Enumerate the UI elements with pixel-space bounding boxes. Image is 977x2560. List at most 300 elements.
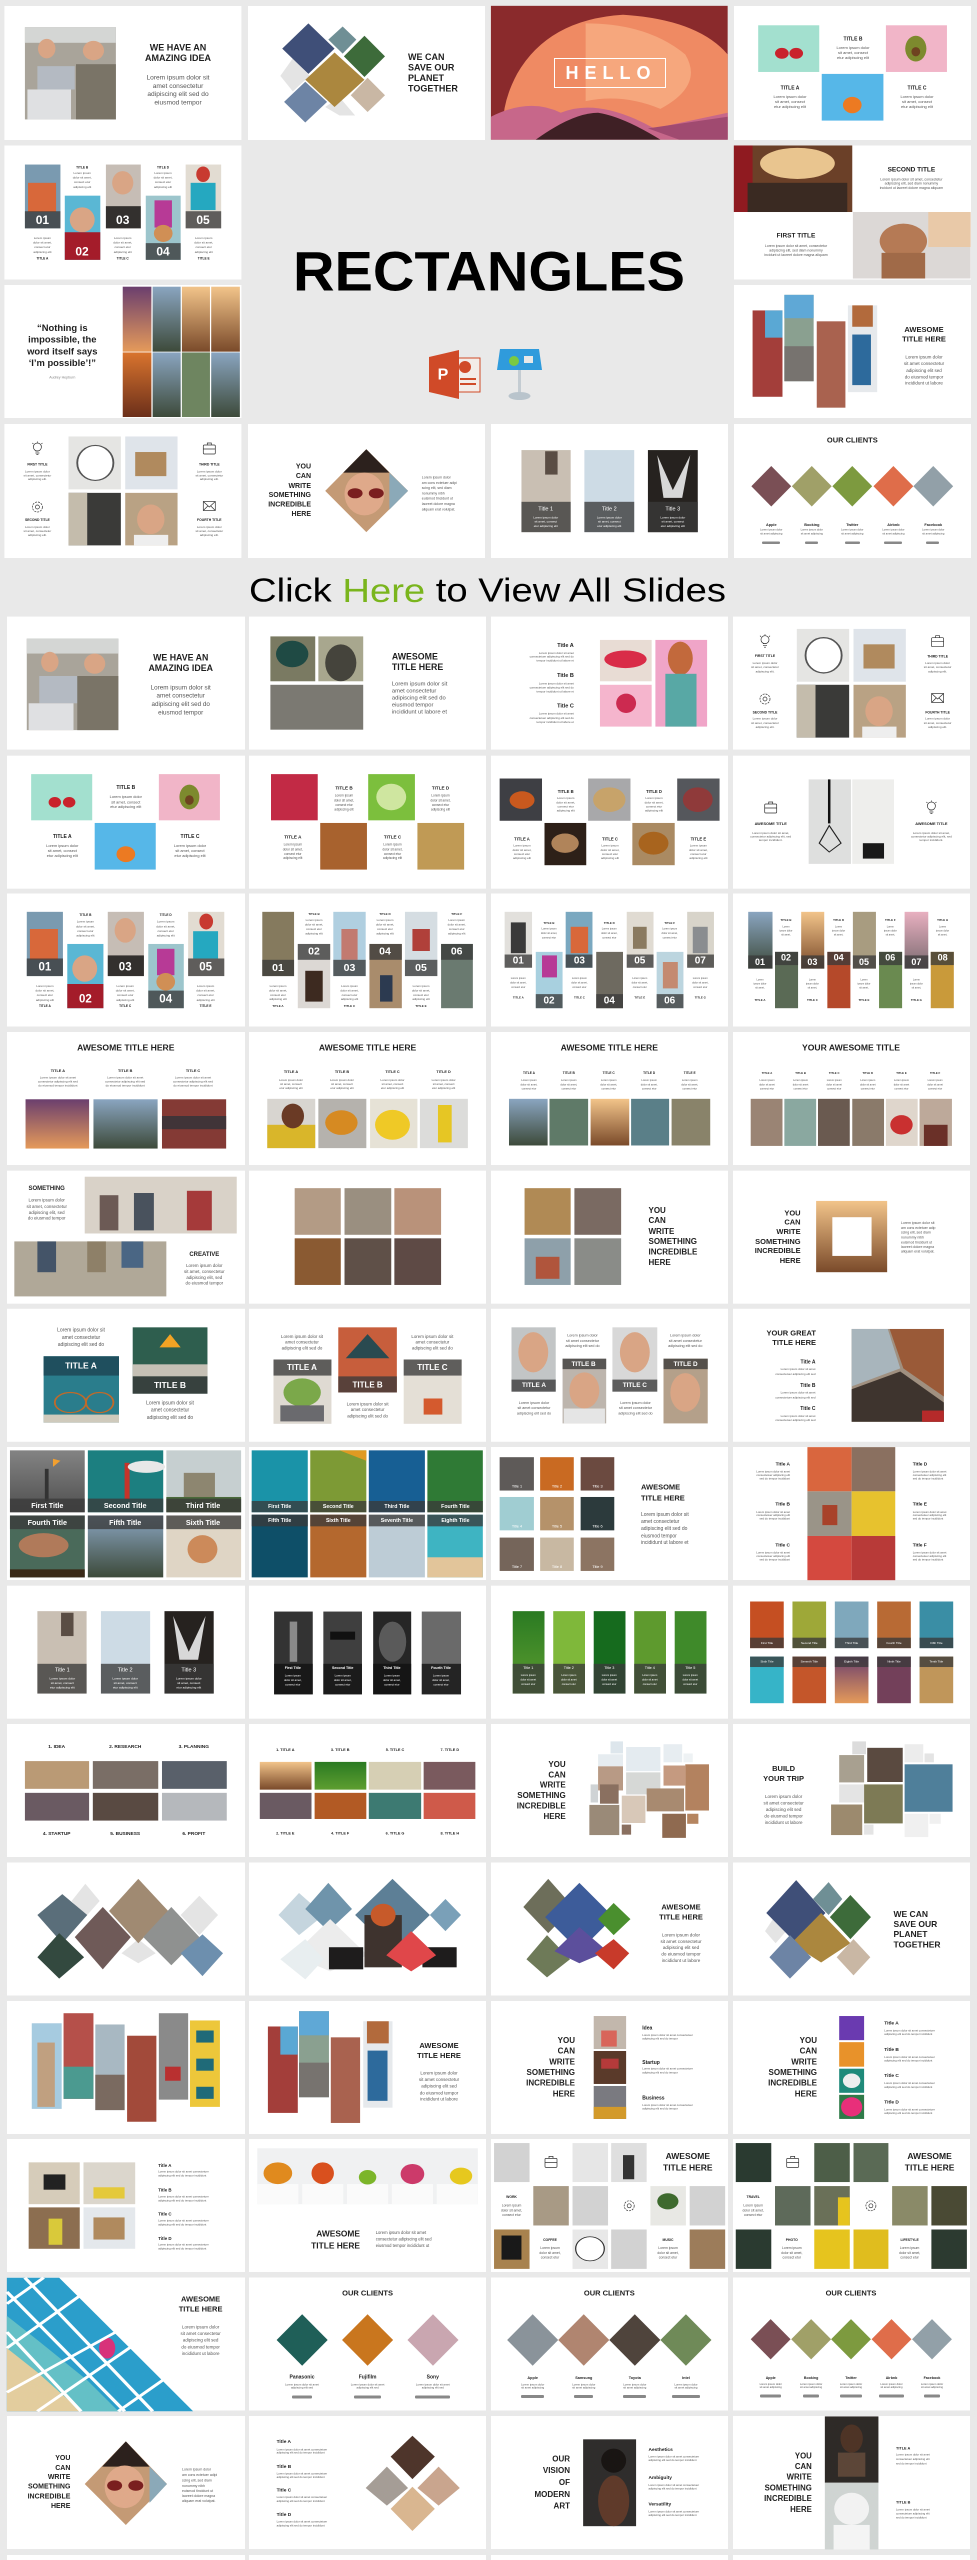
body text <box>158 2170 209 2250</box>
heading: SOMETHING <box>269 492 312 499</box>
heading: YOUR TRIP <box>763 1774 804 1783</box>
slide: something creative <box>7 1171 245 1304</box>
body text: consect etur <box>384 852 402 856</box>
heading <box>179 2294 222 2314</box>
body text <box>277 2447 327 2527</box>
body text: sit amet consectetur <box>419 2077 460 2082</box>
body text: etur adipiscing elit <box>330 1086 354 1090</box>
icon: PowerPoint logo: P <box>438 366 449 384</box>
heading: CAN <box>558 2046 575 2056</box>
body text: dolor sit amet, <box>681 1082 698 1086</box>
titles: TITLE C <box>344 1004 356 1008</box>
body text: adipiscing elit sed <box>766 1807 802 1812</box>
body text: sit amet consectetur <box>660 1939 702 1944</box>
titles: TITLE D <box>646 789 662 794</box>
body text <box>896 2453 930 2520</box>
client text: Lorem ipsum dolor <box>880 2382 903 2386</box>
body text: incididunt ut labore <box>182 2351 220 2356</box>
titles: FIRST TITLE <box>27 462 48 466</box>
body text: Lorem <box>782 926 790 928</box>
body text: Lorem ipsum dolor sit amet, <box>913 831 950 835</box>
body text: consect etur <box>900 2256 920 2260</box>
body text: sit amet consectetur <box>669 1339 703 1343</box>
body text: Lorem ipsum dolor <box>110 794 143 799</box>
body text: Lorem ipsum dolor sit amet, consectetur <box>765 244 828 248</box>
slide: eight numbered <box>733 894 970 1026</box>
heading: YOUR GREAT <box>767 1328 816 1338</box>
titles: TITLE B <box>116 785 136 791</box>
body text: sit amet, consect <box>382 1082 404 1086</box>
photos <box>271 774 464 870</box>
body text: adipiscing elit sed do tempor incididunt <box>884 2111 933 2115</box>
numbers: 04 <box>156 245 170 259</box>
titles: TITLE A <box>896 2447 910 2451</box>
heading: TITLE HERE <box>659 1912 703 1922</box>
tile labels: Title 8 <box>552 1565 562 1569</box>
body text <box>533 515 685 528</box>
heading: OUR CLIENTS <box>826 2288 876 2298</box>
overlay titles <box>285 1666 451 1670</box>
heading: TOGETHER <box>894 1940 941 1950</box>
titles: TITLE D <box>833 918 844 922</box>
body text: dolor sit amet <box>860 1082 876 1086</box>
icons <box>545 2156 634 2211</box>
titles: TITLE B <box>544 921 554 925</box>
body text: Lorem ipsum dolor sit amet consectetuer <box>642 2033 693 2037</box>
overlay titles: Ninth Title <box>887 1659 901 1663</box>
body text: adipiscing elit sed do <box>392 695 446 701</box>
slide: six business steps <box>7 1724 245 1857</box>
body text: adipiscing elit sed do tempor incididunt <box>884 2032 933 2036</box>
labels <box>506 2195 674 2242</box>
heading: ART <box>554 2502 570 2510</box>
body text: Lorem ipsum <box>284 842 302 846</box>
heading: OUR CLIENTS <box>342 2288 393 2298</box>
numbers: 05 <box>634 956 646 966</box>
names: Twitter <box>845 2376 857 2380</box>
heading <box>534 2454 570 2510</box>
title <box>29 1186 219 1258</box>
titles: TITLE G <box>695 996 707 1000</box>
client text: Lorem ipsum dolor <box>674 2382 698 2386</box>
body text: sed do tempor incididunt <box>896 2516 927 2520</box>
body text: incididunt ut labore <box>420 2097 458 2102</box>
overlay text: sit amet, consect <box>114 1681 137 1685</box>
client text: Lorem ipsum dolor <box>623 2382 646 2386</box>
body text: Lorem <box>939 926 946 928</box>
heading: INCREDIBLE <box>755 1246 801 1255</box>
photos <box>270 636 363 730</box>
overlay text: consect etur <box>433 1682 449 1686</box>
numbers: 03 <box>344 962 355 974</box>
overlay text: Lorem ipsum <box>602 1673 617 1677</box>
overlay titles: Title 3 <box>181 1668 196 1674</box>
overlay text: Lorem ipsum dolor <box>176 1677 202 1681</box>
body text: sit amet consectetur <box>566 1339 600 1343</box>
slide: hello canyon <box>491 6 728 140</box>
heading <box>268 463 312 518</box>
heading <box>526 2036 576 2098</box>
slide: amazing idea (grid) <box>7 617 245 750</box>
titles <box>800 1359 816 1412</box>
body text: adipiscing elit sed do tempor incididunt <box>158 2198 206 2202</box>
body text: dolor sit amet, <box>116 989 135 993</box>
body text <box>57 1328 195 1421</box>
body text: Lorem ipsum <box>306 918 323 922</box>
right titles <box>913 1461 928 1548</box>
body text: adipiscing elit sed do tempor incididunt <box>277 2475 325 2479</box>
body text: Lorem ipsum dolor <box>422 475 452 479</box>
titles: TITLE C <box>385 1070 400 1074</box>
diamond faces <box>366 2436 460 2531</box>
overlay titles: Sixth Title <box>326 1518 351 1524</box>
body text: do eiusmod tempor <box>181 2344 220 2349</box>
heading: CAN <box>648 1216 666 1225</box>
titles: FIRST TITLE <box>777 232 816 240</box>
labels: 5. TITLE C <box>386 1748 405 1752</box>
overlay titles <box>760 1641 944 1663</box>
flowers <box>839 2016 864 2119</box>
body text: dolor sit amet, <box>571 980 588 984</box>
titles: TITLE C <box>574 996 586 1000</box>
body text: Lorem ipsum dolor <box>773 94 807 99</box>
body text: dolor sit amet, <box>641 1082 658 1086</box>
body text <box>759 1078 943 1091</box>
heading: CAN <box>800 2046 817 2056</box>
body text: dolor sit amet, <box>113 240 132 244</box>
overlay text: dolor sit amet <box>521 1677 536 1681</box>
body text: Lorem ipsum <box>77 920 95 924</box>
titles: TITLE A <box>513 996 525 1000</box>
numbers <box>36 213 210 259</box>
right body text: Lorem ipsum dolor sit amet <box>913 1550 947 1554</box>
body text: Lorem ipsum dolor <box>330 1078 354 1082</box>
photos <box>600 640 707 727</box>
tile labels: Title 5 <box>552 1524 562 1528</box>
body text: adipiscing elit <box>154 185 172 189</box>
tile labels: Title 4 <box>512 1524 522 1528</box>
body text: adipiscing elit <box>601 856 619 860</box>
overlay titles: Sixth Title <box>760 1659 774 1663</box>
body text: Lorem ipsum <box>894 1078 909 1082</box>
overlay text: Lorem ipsum <box>285 1674 302 1678</box>
slide: diamond snowboarder <box>249 1862 486 1996</box>
body text: adipiscing elit sed do tempor incididunt <box>648 2458 697 2462</box>
overlay titles: Title 2 <box>118 1668 133 1674</box>
titles <box>642 2026 665 2101</box>
body text: Lorem ipsum dolor sit amet, <box>752 831 789 835</box>
body text: sit amet consectetur <box>518 1406 551 1410</box>
diamonds <box>507 2314 711 2366</box>
photo titles: TITLE A <box>287 1363 317 1372</box>
numbers: 01 <box>513 956 524 966</box>
body text: tempor incididunt. <box>920 838 943 842</box>
titles: Title C <box>277 2488 292 2494</box>
overlay titles: Title 5 <box>685 1666 695 1670</box>
tile labels: Title 9 <box>592 1565 603 1569</box>
heading: INCREDIBLE <box>526 2079 576 2088</box>
body text: consectetuer adipiscing elit <box>896 2511 930 2515</box>
columns text: TITLE B <box>118 1069 133 1073</box>
titles: TITLE B <box>795 1071 806 1075</box>
left body text: Lorem ipsum dolor sit amet <box>756 1550 790 1554</box>
body text: dolor sit amet, <box>382 847 403 851</box>
body text: ipsum dolor <box>754 982 767 986</box>
body text: dolor sit amet, <box>154 175 173 179</box>
titles <box>523 1071 696 1075</box>
titles: TITLE B <box>844 37 863 43</box>
body text <box>517 1333 703 1415</box>
titles: SECOND TITLE <box>753 710 778 714</box>
titles: Ambiguity <box>648 2475 672 2481</box>
body text: Lorem <box>913 978 920 982</box>
numbers: 02 <box>543 996 555 1006</box>
body text: consect etur <box>642 1087 657 1091</box>
body text: adipiscing elit <box>645 809 663 813</box>
body text: aliquam erat volutpat. <box>901 1250 934 1254</box>
body text: sit amet, consectetur <box>24 473 51 477</box>
body text: adipiscing elit <box>269 997 287 1001</box>
heading: SOMETHING <box>28 2484 71 2491</box>
icon: Keynote logo <box>497 349 542 400</box>
body text: consectetuer adipiscing elit sed do <box>530 685 574 689</box>
body text: do eiusmod tempor <box>764 1813 803 1818</box>
titles: Versatility <box>648 2501 671 2507</box>
body text: adipiscing elit <box>197 998 215 1002</box>
body text: etur adipiscing elit <box>837 55 870 60</box>
heading: AWESOME TITLE HERE <box>77 1042 175 1052</box>
body text: adipiscing elit sed do <box>147 91 209 98</box>
overlay titles: Fourth Title <box>886 1641 902 1645</box>
body text <box>513 796 708 860</box>
body text: consect etur <box>197 993 214 997</box>
left body text: Lorem ipsum dolor sit amet <box>756 1510 790 1514</box>
body text: consect etur <box>377 927 393 931</box>
titles: Title D <box>884 2099 899 2105</box>
titles: TITLE B <box>76 165 89 169</box>
overlay text: consect etur <box>521 1682 535 1686</box>
body text: adipiscing elit sed <box>421 2084 457 2088</box>
client text <box>285 2382 450 2390</box>
numbers: 05 <box>859 957 869 967</box>
body text: dolor sit amet, <box>601 931 618 935</box>
body text <box>648 2455 699 2517</box>
body text: Lorem ipsum dolor sit amet <box>539 651 574 655</box>
body text: amet consectetur <box>153 83 204 90</box>
overlay titles: Eighth Title <box>441 1518 470 1524</box>
slide: five nature columns <box>491 1032 728 1165</box>
photo frame <box>816 1201 887 1272</box>
body text: adipiscing elit <box>36 998 54 1002</box>
body text: incididunt ut labore <box>765 1820 803 1825</box>
titles <box>755 821 948 826</box>
body text: dolor sit amet <box>826 1082 842 1086</box>
body text: dolor sit amet, <box>448 923 466 927</box>
body text: ipsum dolor <box>858 982 871 986</box>
right titles: Title E <box>913 1502 928 1508</box>
body text <box>146 74 210 106</box>
heading: WRITE <box>540 1781 566 1790</box>
labels: 2. TITLE E <box>276 1832 295 1836</box>
body text: consect etur <box>894 1087 909 1091</box>
slide: your great title <box>733 1309 970 1442</box>
names: Fujifilm <box>359 2374 377 2380</box>
photo: two colleagues <box>25 27 116 119</box>
body text: do eiusmod tempor <box>905 374 944 380</box>
diamond collage <box>37 1879 223 1979</box>
overlay titles: Eighth Title <box>844 1659 859 1663</box>
body text: adipiscing elit. <box>928 670 947 674</box>
body text <box>510 926 709 989</box>
body text: Lorem ipsum <box>270 984 287 988</box>
photo titles: TITLE C <box>623 1382 647 1389</box>
overlay text: etur adipiscing elit <box>50 1686 75 1690</box>
body text: adipiscing elit. <box>28 533 47 537</box>
body text: consect etur <box>542 935 556 939</box>
numbers: 07 <box>695 956 706 966</box>
slide: diamond portrait <box>7 2416 245 2549</box>
body text: Lorem ipsum <box>693 976 708 980</box>
body text: consect etur <box>413 993 429 997</box>
body text: etur adipiscing elit <box>597 524 621 528</box>
body text: adipiscing elit sed <box>183 2338 219 2342</box>
body text <box>751 661 951 729</box>
body text: Lorem ipsum dolor <box>905 354 943 360</box>
numbers: 02 <box>308 945 320 957</box>
body text: etur adipiscing elit <box>381 1086 404 1090</box>
tile labels <box>512 1484 603 1569</box>
body text: Lorem ipsum dolor <box>46 843 79 848</box>
titles <box>514 789 706 841</box>
client text: Lorem ipsum dolor <box>882 528 905 532</box>
right body text: sed do tempor incididunt <box>913 1476 943 1480</box>
body text: sit amet, consect <box>775 99 806 104</box>
titles: TITLE C <box>908 86 927 92</box>
body text: dolor sit amet, <box>35 989 54 993</box>
body text <box>901 1221 935 1254</box>
heading <box>392 652 443 672</box>
slide: modern art vision <box>491 2416 728 2549</box>
body text: Lorem ipsum dolor <box>186 1263 223 1268</box>
overlay text: consect etur <box>602 1682 616 1686</box>
heading: CAN <box>55 2465 70 2472</box>
slide: three landscape columns <box>7 1032 245 1165</box>
body text: consect etur <box>682 1087 697 1091</box>
body text: do eiusmod tempor <box>420 2090 459 2095</box>
body text: Lorem ipsum dolor sit amet <box>539 682 574 686</box>
body text: dolor sit amet, <box>692 980 709 984</box>
body text: Lorem ipsum <box>431 794 450 798</box>
heading: SOMETHING <box>755 1237 801 1246</box>
slide: eight titles aerial <box>249 1447 486 1580</box>
titles: TITLE A <box>762 1071 772 1075</box>
body text: consectetuer adipiscing elit sed <box>775 1372 816 1376</box>
slide: our clients three <box>249 2278 486 2410</box>
body text: scing elit, sed diam <box>182 2479 212 2483</box>
body text: dolor sit amet, <box>283 847 303 851</box>
body text: sit amet, consect <box>280 1082 302 1086</box>
heading: AWESOME <box>641 1482 680 1492</box>
body text: adipiscing elit, sed <box>186 1275 223 1280</box>
body text <box>283 794 451 860</box>
slide: colored walls <box>733 1447 970 1580</box>
heading: INCREDIBLE <box>768 2079 818 2088</box>
overlay text: dolor sit amet, <box>334 1678 352 1682</box>
body text: dolor sit amet, <box>541 931 557 935</box>
names: Facebook <box>924 2376 940 2380</box>
body text: eiusmod tempor incididunt ut <box>376 2243 430 2248</box>
diamond portrait <box>85 2441 167 2525</box>
numbers: 01 <box>272 962 284 974</box>
body text: dolor sit amet, <box>743 2209 764 2213</box>
body text: Lorem ipsum dolor sit amet consectetuer <box>642 2103 693 2107</box>
body text: dolor sit amet, <box>376 923 394 927</box>
photo tiles <box>25 165 221 260</box>
body text: consectetur adipiscing elit sed <box>173 1080 213 1084</box>
body text: dolor sit amet, <box>194 240 213 244</box>
body text: Lorem ipsum dolor sit amet consectetuer <box>648 2509 699 2513</box>
heading: SAVE OUR <box>894 1919 937 1929</box>
heading: YOU <box>648 1206 666 1215</box>
body text: Lorem ipsum <box>341 984 358 988</box>
titles: TITLE A <box>36 256 49 260</box>
body text: Lorem ipsum dolor sit <box>641 1512 689 1518</box>
body text: dolor sit amet <box>793 1082 809 1086</box>
body text: consect etur <box>37 993 53 997</box>
left body text <box>756 1470 790 1562</box>
heading: TITLE HERE <box>179 2304 222 2314</box>
body text <box>281 1334 454 1418</box>
body text: etur adipiscing elit <box>47 853 79 858</box>
body text: adipiscing elit <box>557 809 575 813</box>
client text: sit amet adipiscing <box>800 2385 823 2389</box>
titles: Title B <box>277 2464 292 2470</box>
body text: adipiscing elit <box>431 807 450 811</box>
heading: WE CAN <box>408 52 444 62</box>
body text: dolor sit amet, <box>196 989 215 993</box>
body text: dolor sit amet, <box>560 1082 577 1086</box>
body text: adipiscing elit. <box>200 533 219 537</box>
right body text: consectetuer adipiscing elit <box>913 1473 947 1477</box>
body text: consect etur <box>601 1087 616 1091</box>
body text: Lorem ipsum dolor sit <box>146 1400 195 1406</box>
photo titles: TITLE C <box>417 1363 448 1372</box>
slide: diamond animals <box>733 1862 970 1996</box>
slide: seven numbered <box>491 894 728 1026</box>
body text: Lorem ipsum dolor sit amet <box>781 1414 816 1418</box>
body text: adipiscing elit sed do tempor <box>642 2036 678 2040</box>
titles: TITLE G <box>911 998 923 1002</box>
diagonal beach photo <box>7 2278 193 2411</box>
body text: Lorem ipsum <box>632 976 647 980</box>
client text: sit amet adipiscing <box>760 2385 782 2389</box>
body text: adipiscing elit sed do <box>618 1411 653 1415</box>
labels: COFFEE <box>543 2238 558 2242</box>
titles: TITLE E <box>634 996 645 1000</box>
slide: lips rose <box>491 617 728 750</box>
body text: Lorem ipsum dolor sit amet consectetuer <box>158 2170 209 2174</box>
body text: dolor sit amet, <box>689 848 708 852</box>
body text: do eiusmod tempor incididunt <box>173 1084 213 1088</box>
heading <box>768 2036 818 2098</box>
body text: adipiscing elit sed do tempor incididunt <box>884 2059 933 2063</box>
left body text: consectetuer adipiscing elit <box>756 1513 790 1517</box>
titles: Idea <box>642 2026 653 2032</box>
slide: six numbered <box>249 894 486 1026</box>
body text: Lorem ipsum <box>690 843 708 847</box>
overlay text: consect etur <box>285 1682 300 1686</box>
body text: amet consectetur <box>351 1407 385 1412</box>
